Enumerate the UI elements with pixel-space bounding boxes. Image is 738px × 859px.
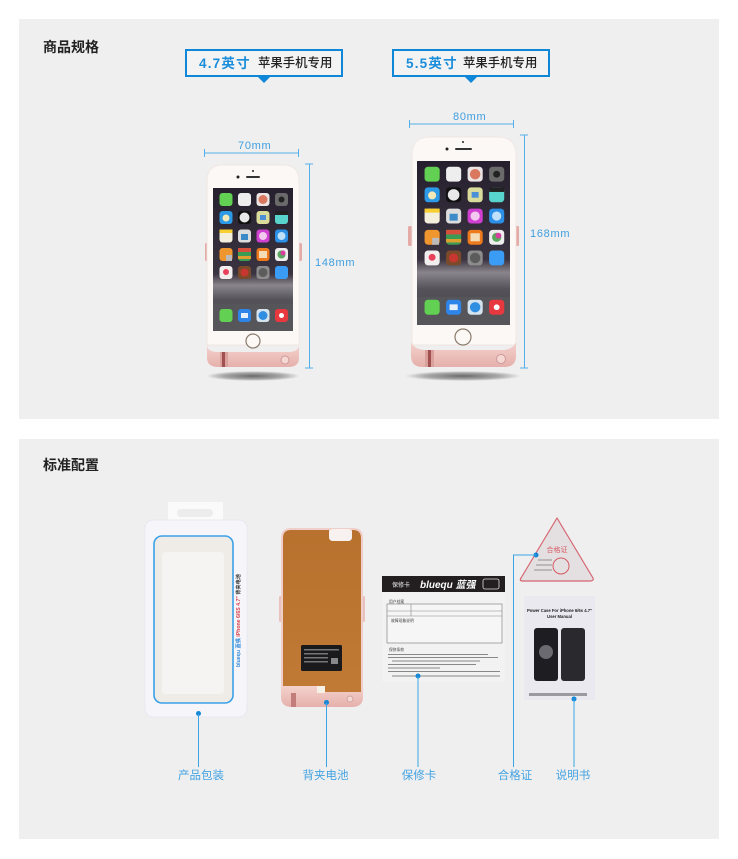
heading: 商品规格: 商品规格 [43,39,99,55]
badge: 4.7 inch: 苹果手机专用 [258,55,332,70]
item: product packaging: bluequ 蓝强 iPhone 6/6S 4.7" 背夹电池 [234,573,242,667]
item: certificate of conformity: 合格证 [498,768,533,782]
item: battery back-clip case: 背夹电池 [302,768,349,782]
width dimension: 70mm: 70mm [238,140,271,152]
item: warranty card: 保修卡 [392,581,410,589]
panel: product specifications [19,19,719,419]
phone: 5.5 inch with battery case [405,137,521,381]
item: warranty card [382,576,505,782]
heading: 标准配置: 标准配置 [43,457,99,473]
height dimension: 148mm: 148mm [315,257,355,269]
item: product packaging [145,502,247,782]
width dimension: 80mm: 80mm [453,111,486,123]
badge: 5.5 inch: 苹果手机专用 [463,55,537,70]
item: user manual: Power Case For iPhone 6/6s 4.7" [527,608,592,613]
item: warranty card: 用户档案 [389,599,404,604]
badge: 4.7 inch [186,50,342,83]
width dimension: 70mm [204,140,298,157]
panel: standard package contents [19,439,719,839]
height dimension: 168mm [520,135,570,368]
phone: 4.7 inch with battery case [205,165,302,381]
item: user manual: User Manual [547,614,572,619]
item: user manual [524,596,595,782]
item: warranty card: 保修条款 [389,647,404,652]
height dimension: 148mm [305,164,355,368]
badge: 4.7 inch: 4.7英寸 [199,55,251,71]
width dimension: 80mm [410,111,514,128]
item: product packaging: 产品包装 [178,768,224,782]
item: warranty card: bluequ 蓝强 [420,579,477,591]
item: certificate of conformity: 合格证 [546,545,568,554]
item: warranty card: 故障现象说明 [391,618,414,623]
item: user manual: 说明书 [556,768,590,782]
item: battery back-clip case [279,528,365,782]
item: warranty card: 保修卡 [402,768,436,782]
badge: 5.5 inch: 5.5英寸 [406,55,458,71]
height dimension: 168mm: 168mm [530,228,570,240]
item: certificate of conformity [498,518,593,782]
badge: 5.5 inch [393,50,549,83]
